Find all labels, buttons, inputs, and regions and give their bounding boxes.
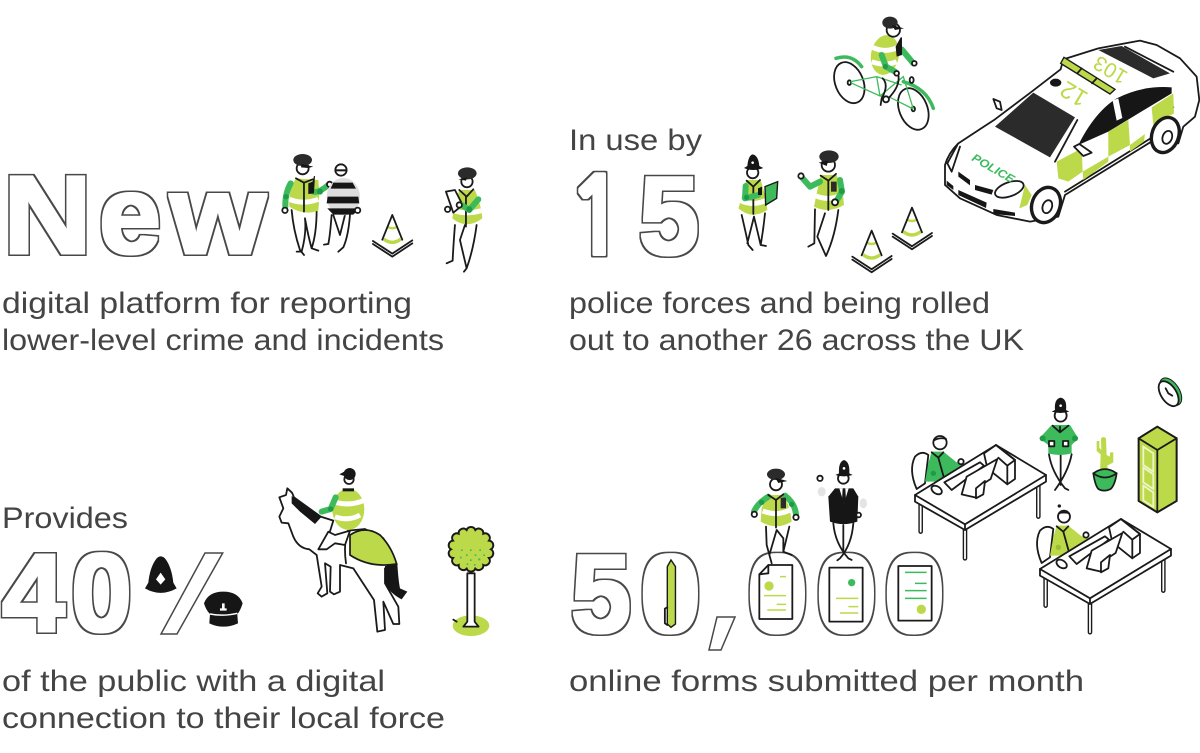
icon: peaked cap xyxy=(204,592,243,627)
icon: form document 2 xyxy=(829,568,863,622)
text: provides: Provides xyxy=(2,502,128,535)
heading: 15 xyxy=(567,155,699,278)
text: description xyxy=(2,287,444,357)
heading: 40%: 0 xyxy=(71,532,132,655)
icon: traffic cones xyxy=(852,208,932,272)
text: description: online forms submitted per month xyxy=(569,665,1084,698)
text: description: digital platform for reporting xyxy=(2,287,412,320)
illustration: officer gesturing xyxy=(798,150,845,256)
panel: provides 40% xyxy=(2,468,493,735)
icon: cactus in pot xyxy=(1093,437,1117,491)
illustration: officer standing on zero xyxy=(752,469,799,563)
text: in use by: In use by xyxy=(569,124,702,157)
text: description xyxy=(2,665,445,735)
car lettering: 103 xyxy=(1090,51,1132,88)
heading: New: e xyxy=(99,154,161,277)
illustration: tree xyxy=(449,527,493,636)
heading: 50,000: 0 xyxy=(640,533,701,656)
heading: 50,000 xyxy=(571,533,945,676)
panel: new digital platform xyxy=(2,154,482,357)
heading: 40%: 4 xyxy=(2,532,65,655)
icon: filing cabinet xyxy=(1139,427,1177,512)
illustration: cyclist officer xyxy=(828,17,934,134)
heading: New: N xyxy=(3,154,92,277)
text: description: connection to their local force xyxy=(2,702,445,735)
car lettering: 12 xyxy=(1056,75,1093,112)
icon: pen xyxy=(665,560,675,627)
heading: 50,000: 0 xyxy=(884,533,945,656)
car lettering xyxy=(970,51,1132,186)
heading: 50,000: 5 xyxy=(571,533,631,656)
illustration: officer with bobby helmet and clipboard xyxy=(738,154,778,250)
heading: 15: 1 xyxy=(567,165,627,270)
heading: 15: 5 xyxy=(639,155,699,278)
panel: 50,000 online forms xyxy=(569,374,1186,698)
illustration: officer with clipboard xyxy=(445,167,482,272)
heading: New xyxy=(3,154,266,277)
text: description xyxy=(569,287,1024,357)
illustration: police car xyxy=(945,41,1199,227)
icon: form document 1 xyxy=(759,565,792,619)
illustration: office desk with second officer xyxy=(1037,504,1171,632)
illustration: suited officer waving xyxy=(817,460,867,560)
icon: wall clock xyxy=(1155,374,1186,410)
text: description: of the public with a digital xyxy=(2,665,385,698)
heading: 50,000: 0 xyxy=(747,533,808,656)
illustration: officer in green uniform xyxy=(1039,398,1078,490)
text: description: out to another 26 across the UK xyxy=(569,324,1024,357)
heading: New: w xyxy=(169,154,266,277)
illustration: office desk with officer xyxy=(912,436,1046,558)
text: description: lower-level crime and incidents xyxy=(2,324,444,357)
heading: 40% xyxy=(2,527,267,660)
icon: form document 3 xyxy=(898,566,932,621)
car lettering: POLICE xyxy=(970,152,1017,186)
panel: in use by 15 police forces xyxy=(567,17,1199,357)
icon: traffic cone xyxy=(373,215,412,257)
text: description: police forces and being rolled xyxy=(569,287,990,320)
illustration: mounted officer xyxy=(279,468,407,632)
heading: 50,000: 0 xyxy=(816,533,877,656)
icon: police helmet xyxy=(145,556,177,593)
illustration: officer talking to a robber xyxy=(282,154,360,255)
